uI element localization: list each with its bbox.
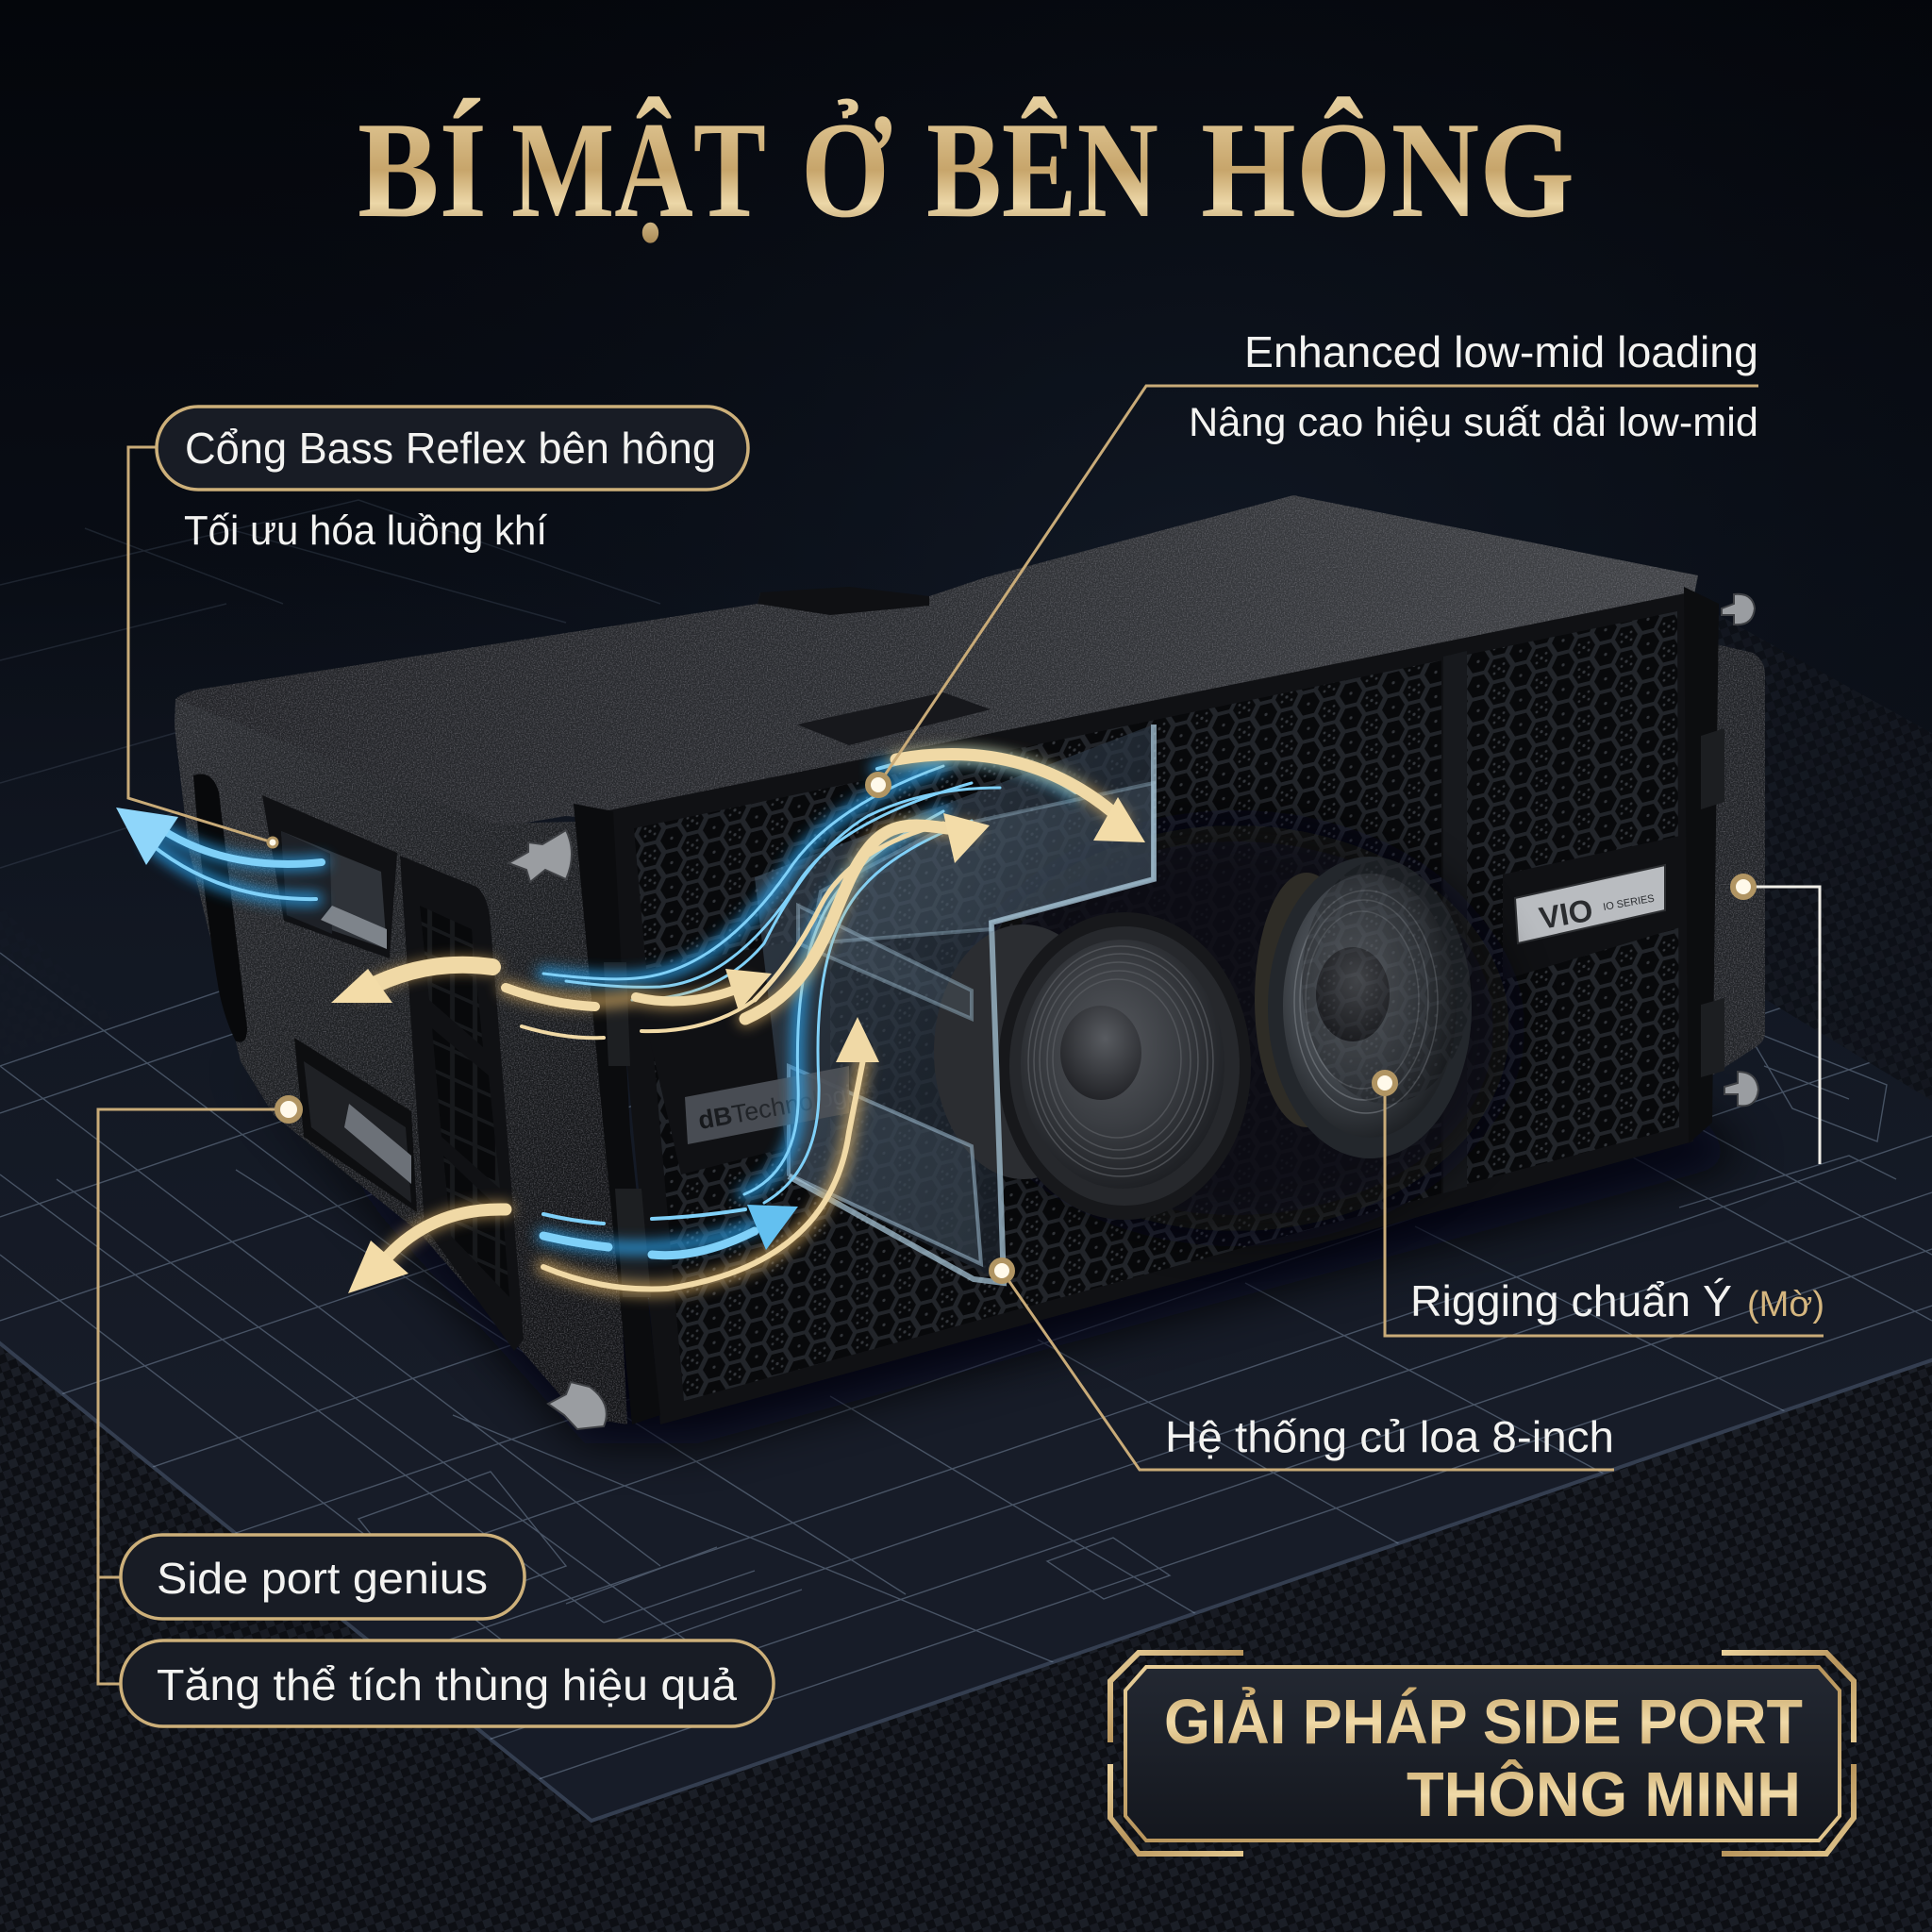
badge: VIO series: IO SERIES xyxy=(1602,893,1656,913)
speaker shadow xyxy=(236,1057,1745,1443)
title: HÔNG xyxy=(1201,93,1574,246)
badge text: THÔNG MINH xyxy=(1407,1759,1801,1830)
cabinet top face xyxy=(175,495,1698,828)
callout: italian rigging: Rigging chuẩn Ý xyxy=(1410,1276,1732,1325)
soft dark backing xyxy=(962,825,1509,1231)
pill: side bass reflex port xyxy=(157,407,748,490)
lower handle xyxy=(294,1038,417,1212)
title: BÊN xyxy=(926,93,1158,246)
title xyxy=(358,93,1574,246)
badge: dBTechnologies: dBTechnologies xyxy=(696,1075,881,1135)
cabinet left side xyxy=(175,699,627,1424)
front right bracket xyxy=(1684,587,1724,1143)
speaker cabinet xyxy=(175,495,1765,1429)
callout: enhanced low-mid loading: Nâng cao hiệu suất dải low-mid xyxy=(1189,400,1758,445)
right end cap xyxy=(1712,643,1765,1075)
rear latch xyxy=(758,587,929,615)
callout: enhanced low-mid loading xyxy=(1189,327,1758,445)
solid panel behind right badge xyxy=(1503,836,1680,980)
badge: VIO series xyxy=(1515,865,1665,943)
pill: increased effective volume: Tăng thể tích thùng hiệu quả xyxy=(157,1660,737,1709)
badge plate xyxy=(1125,1667,1840,1840)
callout: 8-inch driver system: Hệ thống củ loa 8-inch xyxy=(1165,1412,1614,1461)
glass outline xyxy=(789,724,1154,1283)
front face xyxy=(574,587,1724,1424)
glass baffles xyxy=(789,783,1154,1264)
speaker driver right xyxy=(1255,857,1472,1158)
badge: VIO series: VIO xyxy=(1537,892,1595,936)
cutaway interior xyxy=(755,724,1509,1283)
front vertical divider xyxy=(1443,651,1467,1193)
leader lines xyxy=(98,386,1824,1684)
title: BÍ xyxy=(358,93,487,246)
arrowheads xyxy=(116,797,1145,1293)
solid panel behind left badge xyxy=(634,934,830,1174)
badge: smart side port solution xyxy=(1110,1653,1854,1854)
callout: enhanced low-mid loading: Enhanced low-mid loading xyxy=(1244,327,1758,376)
blue airflow glow xyxy=(151,757,1075,1248)
side slot xyxy=(193,774,247,1042)
blueprint sheet xyxy=(0,500,1932,1823)
mesh plate xyxy=(400,856,524,1351)
upper handle xyxy=(262,795,397,958)
pill: side port genius: Side port genius xyxy=(157,1554,488,1603)
honeycomb grille xyxy=(634,611,1679,1401)
pill: increased effective volume xyxy=(121,1641,774,1726)
callout markers xyxy=(268,774,1754,1281)
callout: italian rigging: (Mờ) xyxy=(1747,1285,1824,1324)
gold streams xyxy=(363,755,1123,1290)
title: Ở xyxy=(801,93,891,246)
front left bracket xyxy=(574,804,660,1424)
gold airflow glow xyxy=(363,755,1123,1290)
airflow arrows xyxy=(116,755,1145,1293)
pill: side bass reflex port: Cổng Bass Reflex bên hông xyxy=(185,424,716,473)
speaker driver left xyxy=(934,912,1251,1220)
bolts xyxy=(508,594,1758,1429)
blue streams xyxy=(151,757,1075,1256)
title: MẬT xyxy=(511,93,766,246)
top recessed plate xyxy=(797,692,991,745)
badge text: GIẢI PHÁP SIDE PORT xyxy=(1164,1687,1803,1757)
badge text xyxy=(1164,1687,1803,1830)
text: airflow optimisation: Tối ưu hóa luồng khí xyxy=(184,508,548,554)
pill: side port genius xyxy=(121,1535,525,1619)
badge outer brackets xyxy=(1110,1653,1854,1854)
